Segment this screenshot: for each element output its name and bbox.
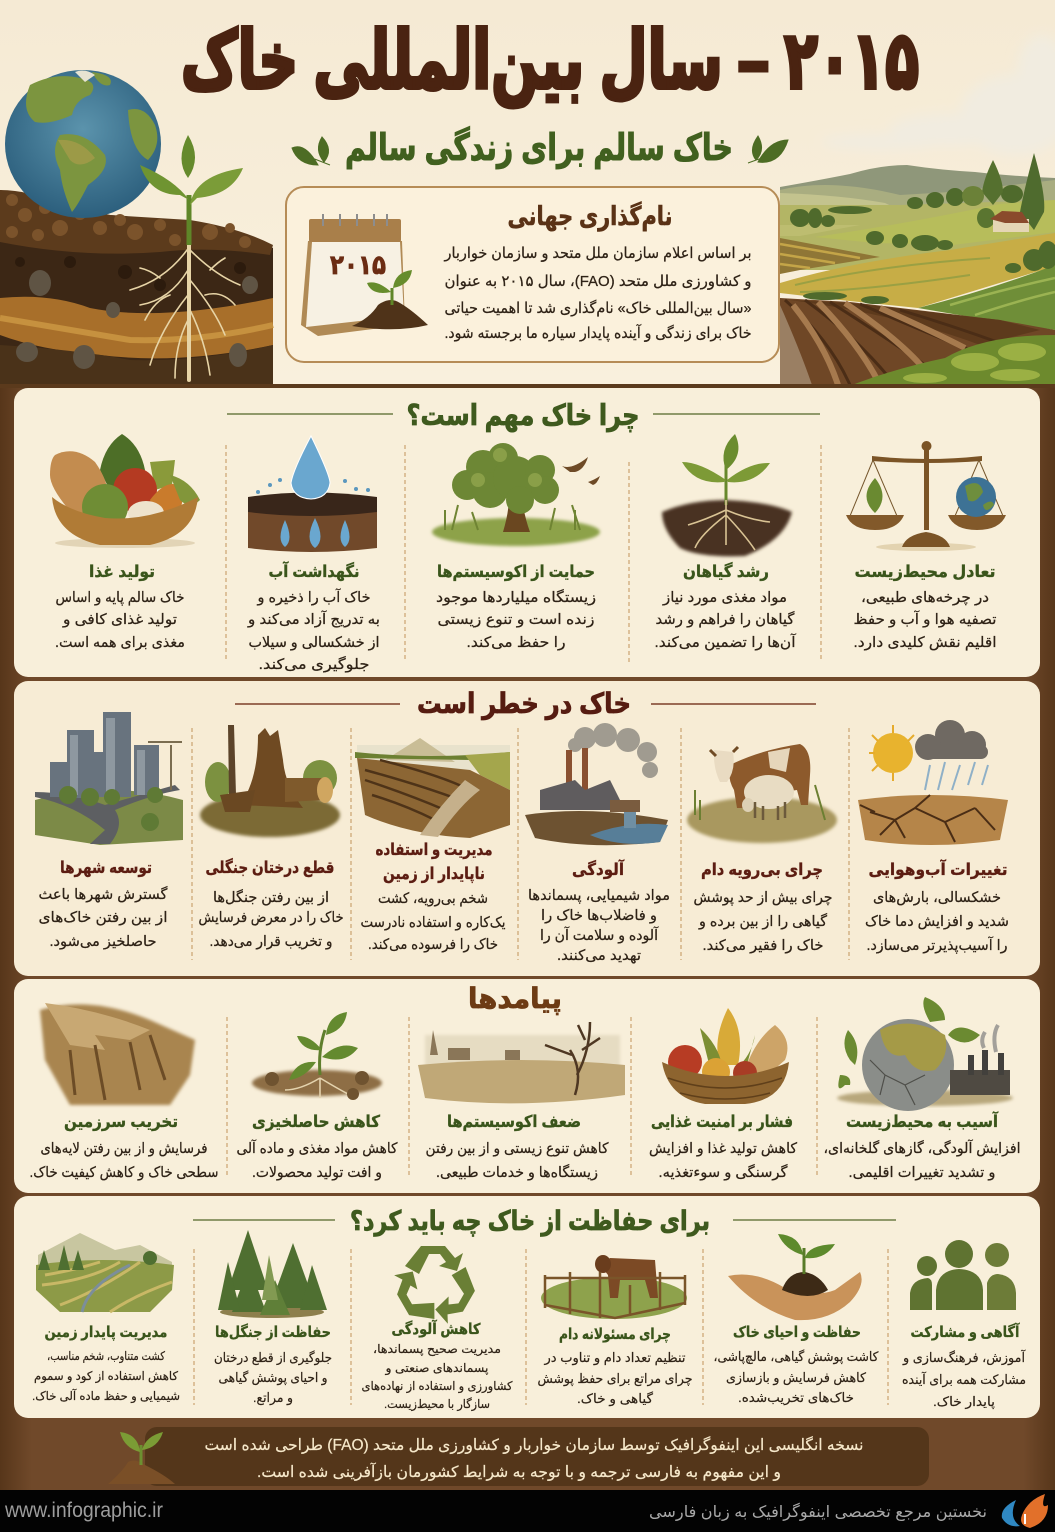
item text — [714, 1349, 879, 1406]
item text: گیاهی و خاک. — [577, 1391, 654, 1407]
item: deforestation — [198, 725, 344, 950]
item text — [538, 1350, 692, 1407]
item text: و مراتع. — [253, 1390, 293, 1406]
callout: global designation — [286, 187, 779, 362]
item: unsustainable land use — [355, 738, 510, 953]
item title: کاهش آلودگی — [392, 1320, 481, 1338]
item title: تولید غذا — [89, 563, 155, 582]
item text: پایدار خاک. — [933, 1394, 995, 1410]
item: responsible grazing — [538, 1255, 692, 1407]
item text: گسترش شهرها باعث — [38, 886, 168, 903]
item: plant growth — [654, 434, 797, 651]
title: ۲۰۱۵ – سال بین‌المللی خاک — [181, 16, 919, 108]
item text: آموزش، فرهنگ‌سازی و — [902, 1349, 1026, 1366]
icon: leaf left — [292, 137, 330, 165]
icon: scales — [846, 441, 1006, 551]
item text: زیستگاه میلیاردها موجود — [436, 589, 596, 606]
item title: قطع درختان جنگلی — [206, 857, 334, 878]
panel: what to do — [14, 1196, 1040, 1418]
icon: cracked globe with factory — [837, 997, 1013, 1111]
icon: people — [910, 1240, 1016, 1310]
item: climate change — [858, 720, 1009, 954]
text block: و کشاورزی ملل متحد (FAO)، سال ۲۰۱۵ به عنوان — [445, 273, 752, 290]
icon: leaf right — [748, 136, 788, 163]
item text: تصفیه هوا و آب و حفظ — [854, 610, 996, 628]
icon: drought and storm — [858, 720, 1008, 845]
item text: کاهش مواد مغذی و ماده آلی — [236, 1139, 398, 1157]
item text: خاک را در معرض فرسایش — [198, 910, 344, 926]
item title: چرای مسئولانه دام — [559, 1326, 671, 1344]
item text: زیستگاه‌ها و خدمات طبیعی. — [436, 1164, 598, 1181]
item: environmental damage — [824, 997, 1020, 1181]
item title: آلودگی — [572, 858, 624, 880]
item text — [854, 590, 996, 651]
item text: سطحی خاک و کاهش کیفیت خاک. — [30, 1165, 218, 1181]
logo — [1002, 1494, 1048, 1528]
icon: cow and sheep — [687, 744, 837, 843]
item: fertility loss — [236, 1012, 398, 1181]
icon: hand holding soil — [728, 1234, 862, 1320]
item text: شیمیایی و حفظ ماده آلی خاک. — [32, 1388, 180, 1404]
panel: why soil matters — [14, 388, 1040, 677]
icon: tree stump and logs — [200, 725, 340, 837]
item text: شخم بی‌رویه، کشت — [378, 891, 488, 907]
item: food security — [649, 1008, 797, 1181]
item text: خاک‌های تخریب‌شده. — [738, 1390, 854, 1406]
item: ecosystem support — [432, 443, 600, 651]
item: environmental balance — [846, 441, 1006, 651]
heading: چرا خاک مهم است؟ — [406, 400, 640, 433]
brand tagline: نخستین مرجع تخصصی اینفوگرافیک به زبان فارسی — [649, 1502, 987, 1522]
item: sustainable land management — [32, 1233, 180, 1404]
heading: نام‌گذاری جهانی — [508, 201, 672, 232]
item text: از بین رفتن خاک‌های — [38, 910, 168, 926]
item text: مغذی برای همه است. — [55, 635, 185, 651]
item text — [649, 1141, 797, 1181]
item text: مشارکت همه برای آینده — [902, 1371, 1026, 1388]
item: protection and restoration — [714, 1234, 879, 1406]
item text: تنظیم تعداد دام و تناوب در — [543, 1350, 686, 1366]
item text — [654, 590, 797, 651]
icon: factory — [525, 723, 668, 845]
item: pollution — [525, 723, 670, 964]
item title: فشار بر امنیت غذایی — [651, 1113, 793, 1132]
icon: tree and birds — [432, 443, 600, 546]
item text: کاهش تنوع زیستی و از بین رفتن — [426, 1141, 609, 1157]
item text — [824, 1139, 1020, 1181]
item text — [528, 888, 670, 964]
item text — [360, 891, 506, 953]
item text — [362, 1342, 513, 1412]
item title: تخریب سرزمین — [64, 1113, 178, 1132]
panel: consequences — [14, 979, 1040, 1193]
item text: سازگار با محیط‌زیست. — [384, 1397, 490, 1412]
item text: مواد شیمیایی، پسماندها — [528, 888, 670, 904]
item title: چرای بی‌رویه دام — [701, 861, 823, 880]
item: land degradation — [30, 1003, 218, 1181]
item text: را حفظ می‌کند. — [466, 635, 566, 651]
item text — [865, 890, 1009, 954]
icon: struggling seedling — [252, 1012, 382, 1100]
item title: توسعه شهرها — [60, 859, 152, 878]
icon: water drop on soil — [248, 436, 377, 552]
item text — [426, 1141, 609, 1181]
text block: خاک برای زندگی و آینده پایدار سیاره ما برجسته شود. — [444, 324, 752, 343]
footer text: نسخه انگلیسی این اینفوگرافیک توسط سازمان خواربار و کشاورزی ملل متحد (FAO) طراحی شده است — [204, 1436, 864, 1455]
icon: desk calendar — [301, 214, 428, 336]
item: forest protection — [214, 1230, 332, 1406]
item text: کاهش فرسایش و بازسازی — [726, 1370, 867, 1386]
icon: city — [35, 712, 183, 845]
item text: کاشت پوشش گیاهی، مالچ‌پاشی، — [714, 1349, 879, 1365]
item text: گیاهان را فراهم و رشد — [656, 611, 795, 628]
item text: شدید و افزایش دما خاک — [865, 914, 1009, 930]
item text: خاک را فرسوده می‌کند. — [368, 937, 498, 953]
website url: www.infographic.ir — [4, 1499, 163, 1522]
item title: مدیریت و استفاده — [376, 841, 492, 860]
item text: یک‌کاره و استفاده نادرست — [360, 915, 506, 931]
item text: خشکسالی، بارش‌های — [873, 890, 1001, 906]
item title: تغییرات آب‌وهوایی — [868, 858, 1008, 880]
item text — [30, 1141, 218, 1181]
item text — [214, 1350, 332, 1406]
item title: حفاظت از جنگل‌ها — [215, 1323, 331, 1341]
item: water conservation — [247, 436, 380, 673]
item text: و فاضلاب‌ها خاک را — [541, 908, 657, 924]
illustration: soil cross-section with roots — [0, 70, 273, 385]
item text: مواد مغذی مورد نیاز — [662, 590, 787, 606]
item text: خاک را فقیر می‌کند. — [702, 938, 824, 954]
brand bar — [0, 1490, 1055, 1532]
item text: پسماندهای صنعتی و — [384, 1361, 488, 1376]
icon: eroded cliff — [40, 1003, 195, 1105]
item text — [902, 1349, 1026, 1410]
item text — [694, 890, 832, 954]
heading: خاک در خطر است — [417, 688, 631, 720]
icon: barren land with dead tree — [418, 1022, 625, 1103]
item text: جلوگیری از قطع درختان — [214, 1350, 332, 1366]
item title: تعادل محیط‌زیست — [854, 563, 996, 581]
icon: seedling — [140, 135, 243, 245]
item text: گیاهی را از بین برده و — [698, 913, 827, 930]
item text: حاصلخیز می‌شود. — [50, 934, 156, 950]
item text: گرسنگی و سوء‌تغذیه. — [658, 1164, 788, 1181]
icon: pine trees — [218, 1230, 327, 1318]
item text — [436, 589, 596, 651]
item text: جلوگیری می‌کند. — [258, 656, 370, 673]
item text: کاهش تولید غذا و افزایش — [649, 1141, 797, 1157]
item text: مدیریت صحیح پسماندها، — [373, 1342, 501, 1357]
icon: eroded furrows — [355, 738, 510, 838]
item title: نگهداشت آب — [268, 560, 360, 582]
footer note — [108, 1427, 929, 1486]
item text: کشت متناوب، شخم مناسب، — [47, 1349, 165, 1364]
item text — [38, 886, 168, 950]
item text: اقلیم نقش کلیدی دارد. — [854, 635, 996, 651]
item text: چرای بیش از حد پوشش — [694, 890, 832, 906]
heading: پیامدها — [468, 983, 562, 1015]
item text: زنده است و تنوع زیستی — [438, 612, 594, 628]
illustration: farm landscape — [780, 35, 1055, 385]
subtitle: خاک سالم برای زندگی سالم — [345, 126, 733, 169]
item: overgrazing — [687, 744, 837, 954]
icon: sprout with roots — [662, 434, 792, 556]
text block: بر اساس اعلام سازمان ملل متحد و سازمان خواربار — [444, 245, 752, 262]
item title: حمایت از اکوسیستم‌ها — [437, 563, 595, 582]
item text: را آسیب‌پذیرتر می‌سازد. — [866, 936, 1008, 954]
item text — [55, 590, 185, 651]
item text: آن‌ها را تضمین می‌کند. — [654, 633, 797, 651]
hero section — [0, 0, 1055, 385]
panel: soil at risk — [14, 681, 1040, 976]
item text: تولید غذای کافی و — [62, 612, 177, 628]
item title: ناپایدار از زمین — [383, 865, 485, 884]
item text: کاهش استفاده از کود و سموم — [34, 1369, 178, 1384]
heading: برای حفاظت از خاک چه باید کرد؟ — [350, 1206, 710, 1237]
item title: آگاهی و مشارکت — [910, 1323, 1020, 1341]
icon: terraced landscape — [36, 1233, 174, 1312]
icon: desk calendar: ۲۰۱۵ — [330, 250, 386, 280]
item text: فرسایش و از بین رفتن لایه‌های — [40, 1141, 208, 1157]
item title: مدیریت پایدار زمین — [44, 1324, 168, 1342]
icon: sprout on soil mound — [108, 1432, 175, 1484]
item text — [198, 889, 344, 950]
item text: و تخریب قرار می‌دهد. — [210, 934, 332, 950]
item text: خاک آب را ذخیره و — [257, 588, 370, 606]
item text — [32, 1349, 180, 1404]
text block — [444, 245, 752, 343]
footer text — [204, 1436, 864, 1482]
icon: food basket — [662, 1008, 789, 1104]
item text: افزایش آلودگی، گازهای گلخانه‌ای، — [824, 1139, 1020, 1157]
item text: به تدریج آزاد می‌کند و — [247, 610, 380, 628]
item text: خاک سالم پایه و اساس — [56, 590, 184, 606]
item text: کشاورزی و استفاده از نهاده‌های — [362, 1379, 513, 1394]
item title: ضعف اکوسیستم‌ها — [447, 1113, 581, 1132]
text block: «سال بین‌المللی خاک» نام‌گذاری شد تا اهمیت حیاتی — [444, 299, 752, 317]
footer text: و این مفهوم به فارسی ترجمه و با توجه به شرایط کشورمان بازآفرینی شده است. — [257, 1462, 781, 1482]
icon: food bowl — [50, 434, 200, 548]
item title — [376, 841, 492, 884]
item: food production — [50, 434, 200, 651]
item text: و تشدید تغییرات اقلیمی. — [848, 1165, 996, 1181]
item text: چرای مراتع برای حفظ پوشش — [538, 1371, 692, 1387]
item: reduce pollution — [362, 1246, 513, 1412]
item text: و احیای پوشش گیاهی — [218, 1370, 328, 1386]
item text: تهدید می‌کنند. — [557, 948, 641, 964]
item text — [236, 1139, 398, 1181]
illustration: globe — [5, 70, 161, 218]
item: urban expansion — [35, 712, 183, 950]
item title: کاهش حاصلخیزی — [252, 1113, 380, 1132]
icon: recycling symbol — [388, 1246, 483, 1329]
item text — [247, 588, 380, 673]
item text: در چرخه‌های طبیعی، — [861, 590, 989, 606]
item: awareness — [902, 1240, 1026, 1410]
item title: رشد گیاهان — [683, 561, 769, 581]
item text: از بین رفتن جنگل‌ها — [213, 889, 329, 906]
item: weakened ecosystems — [418, 1022, 625, 1181]
item title: آسیب به محیط‌زیست — [846, 1110, 998, 1131]
item text: و افت تولید محصولات. — [252, 1165, 382, 1181]
item text: آلوده و سلامت آن را — [540, 926, 659, 944]
icon: cow in pasture — [541, 1255, 687, 1319]
item title: حفاظت و احیای خاک — [733, 1324, 861, 1341]
item text: از خشکسالی و سیلاب — [248, 635, 380, 651]
